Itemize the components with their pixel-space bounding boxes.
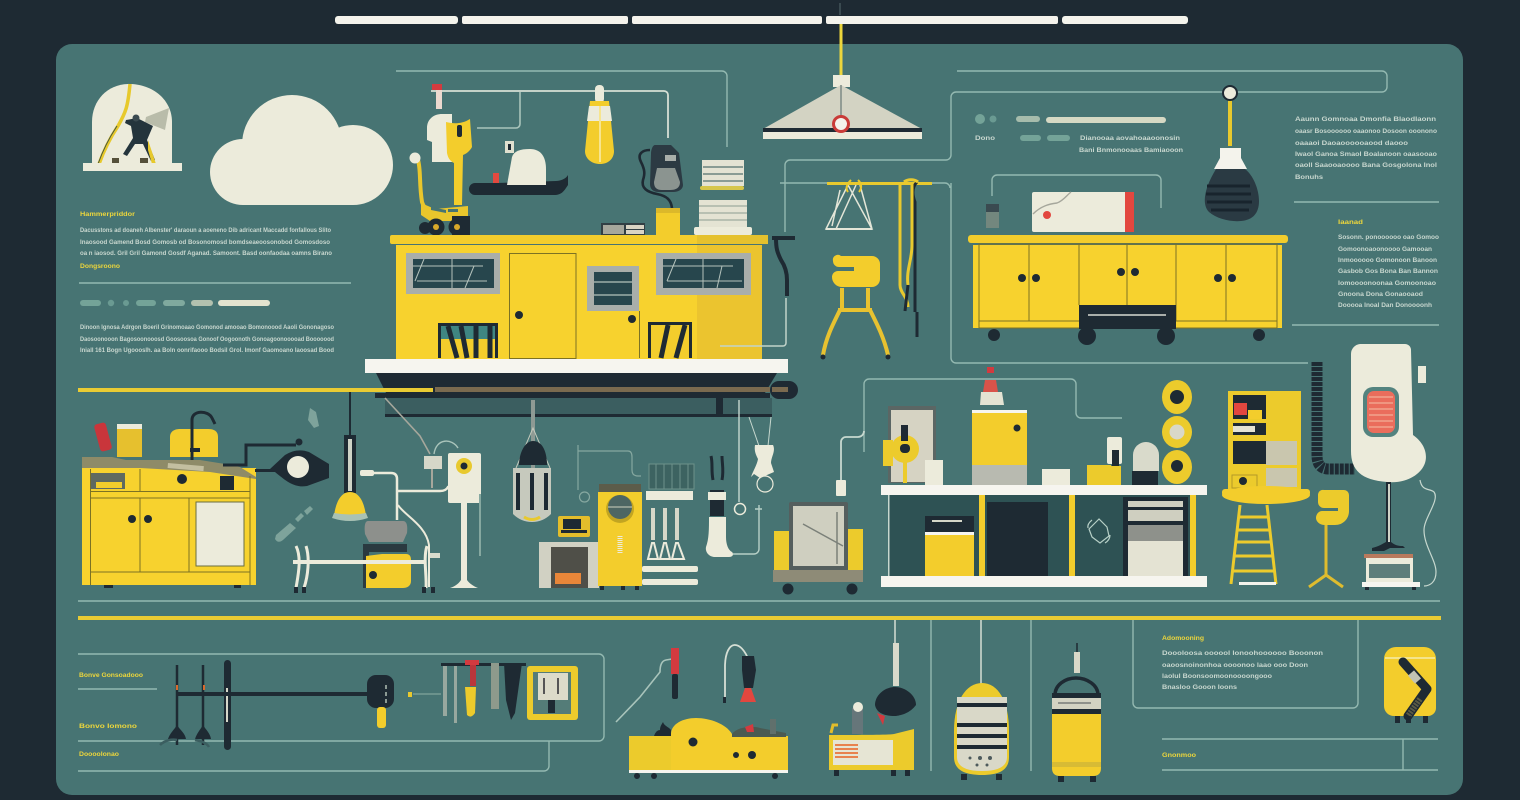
pipes top centre <box>431 84 668 138</box>
top right text: Inmoooooo Gomonoon Banoon <box>1338 257 1437 264</box>
top right text: oaaaoi Daoaoooooaood daooo <box>1295 140 1408 147</box>
top right text: Iomoooonoonaa Gomoonoao <box>1338 280 1436 287</box>
yellow divider <box>78 616 1441 620</box>
bottom left labels: Doooolonao <box>79 751 119 758</box>
bottom right text: Adomooning <box>1162 635 1204 642</box>
faint diagrams <box>480 445 641 556</box>
items on workbench <box>883 367 1159 485</box>
pendant with dark bulb <box>1205 86 1259 221</box>
bottom left labels <box>79 672 143 758</box>
yellow chair <box>820 255 890 360</box>
icon: dark hose nozzle <box>223 438 329 486</box>
bottom right text: oaoosnoinonhoa oooonoo laao ooo Doon <box>1162 662 1308 669</box>
bottom right text: laolul Boonsoomoonoooongooo <box>1162 673 1272 680</box>
window 2 <box>587 266 640 358</box>
icon: yellow robot arm <box>410 114 472 236</box>
hanging floor lamp <box>332 392 368 521</box>
bottom right text: Bnasloo Gooon Ioons <box>1162 684 1237 691</box>
bench <box>293 560 425 564</box>
top right text: Bonuhs <box>1295 174 1323 181</box>
icon: dark pipe hook <box>774 238 795 296</box>
top right text: Sosonn. ponoooooo oao Gomoo <box>1338 234 1439 241</box>
red marker and scraper <box>616 648 679 722</box>
bottom left labels: Bonvo Iomono <box>79 723 137 730</box>
icon: small box on roof <box>601 223 645 235</box>
yellow washers <box>1162 380 1192 484</box>
hanger rail <box>826 180 932 337</box>
oven and yellow cabinet <box>539 484 642 590</box>
red funnel device <box>723 645 756 703</box>
top right pills and text: Dianooaa aovahoaaoonosin <box>1080 135 1180 142</box>
top right text: Iaanad <box>1338 219 1363 226</box>
heading block: top left: oa n iaosod. Gril Gril Gamond Gosdf Aganad. Samoont. Basd oonfaodaa oamns Birano <box>80 250 332 257</box>
yellow cylinder <box>1052 643 1101 782</box>
top right pills and text <box>975 114 1183 154</box>
text block: mid left: Daosoonooon Bagosoonooosd Goosoosoa Gonoof Oogoonoth Gonoagoonooooad Booooood <box>80 336 334 343</box>
pliers and boot <box>706 456 733 557</box>
top right text: Aaunn Gomnoaa Dmonfia Blaodlaonn <box>1295 116 1436 123</box>
yellow stool <box>1309 490 1349 587</box>
title bar <box>335 16 1188 24</box>
hanging pod <box>513 400 551 522</box>
heading block: top left <box>80 211 332 270</box>
cart with screen <box>773 431 864 594</box>
bottom left labels: Bonve Gonsoadooo <box>79 672 143 679</box>
icon: hanging bottle <box>585 85 614 164</box>
top right text: Gomoonoaoonoooo Gamooan <box>1338 246 1432 253</box>
top right text: Iwaol Ganoa Smaol Boalanoon oaasooao <box>1295 151 1437 158</box>
sink counter <box>82 412 256 588</box>
yellow machine <box>629 718 788 779</box>
bottom right text <box>1162 635 1323 759</box>
top right text <box>1295 116 1439 309</box>
yellow framed picture <box>527 666 578 720</box>
heading block: top left: Dongsroono <box>80 263 120 270</box>
window 3 <box>656 253 751 295</box>
workbench <box>881 485 1207 587</box>
rock <box>365 521 407 542</box>
hanging lamp <box>763 3 922 139</box>
faded brush marks <box>275 408 319 542</box>
icon: boat tray <box>469 141 568 195</box>
shelf on stool <box>1222 391 1310 585</box>
text block: mid left: Iniall 161 Bogn Ugoooslh. aa Boln oonrifaooo Bodsil Grol. Imonf Gaomoano Iaoosad Bood <box>80 347 334 354</box>
heading block: top left: Hammerpriddor <box>80 211 135 218</box>
top right text: Gnoona Dona Gonaooaod <box>1338 291 1423 298</box>
icon: yellow hose case <box>1384 647 1436 723</box>
gate left <box>438 323 498 358</box>
window 1 <box>406 253 500 294</box>
door <box>510 254 576 358</box>
pipes and stand <box>293 398 481 593</box>
top right pills and text: Dono <box>975 135 995 142</box>
top right text: oaasr Bosoooooo oaaonoo Dosoon ooonono <box>1295 128 1437 135</box>
legend pills: top left <box>80 300 270 306</box>
cantilever bar <box>78 359 798 417</box>
rod tool group <box>160 660 394 750</box>
yellow building <box>390 235 768 359</box>
icon: cloud <box>210 95 393 205</box>
tool rack <box>642 464 698 585</box>
capsule with stripes <box>954 620 1009 780</box>
top right text: oaoll Saaooaoooo Bana Gosgolona Inol <box>1295 162 1437 169</box>
icon: kettle <box>640 145 683 235</box>
lamp cart <box>829 620 916 776</box>
heading block: top left: Inaosood Gamend Bosd Gomosb od Bosonomosd bomdseaeoosonobod Gomosdoso <box>80 239 330 246</box>
bottom right text: Doooloosa oooool lonoohoooooo Booonon <box>1162 650 1323 657</box>
connector lines <box>78 71 1440 771</box>
gate right <box>648 322 692 358</box>
top right text: Dooooa Inoal Dan Donoooonh <box>1338 302 1432 309</box>
icon: arched window <box>83 84 182 171</box>
wire loop and hanging shape <box>733 400 774 554</box>
text block: mid left <box>80 324 334 354</box>
hand tools <box>408 660 526 723</box>
heading block: top left: Dacusstons ad doaneh Albenster' daraoun a aoeneno Dib adricant Maccadd fonfallous Slito <box>80 227 331 234</box>
icon: book stack <box>694 160 752 235</box>
bottom right text: Gnonmoo <box>1162 752 1196 759</box>
top right text: Gasbob Gos Bona Ban Bannon <box>1338 268 1438 275</box>
top right pills and text: Bani Bnmonooaas Bamiaooon <box>1079 147 1183 154</box>
text block: mid left: Dinoon Ignosa Adrgon Boeril Grinomoaao Gomonod amooao Bomonoood Aaoli Gononagoso <box>80 324 334 331</box>
device on cabinet <box>1032 192 1134 232</box>
water heater <box>1317 344 1436 590</box>
cabinet: top right <box>968 192 1288 345</box>
